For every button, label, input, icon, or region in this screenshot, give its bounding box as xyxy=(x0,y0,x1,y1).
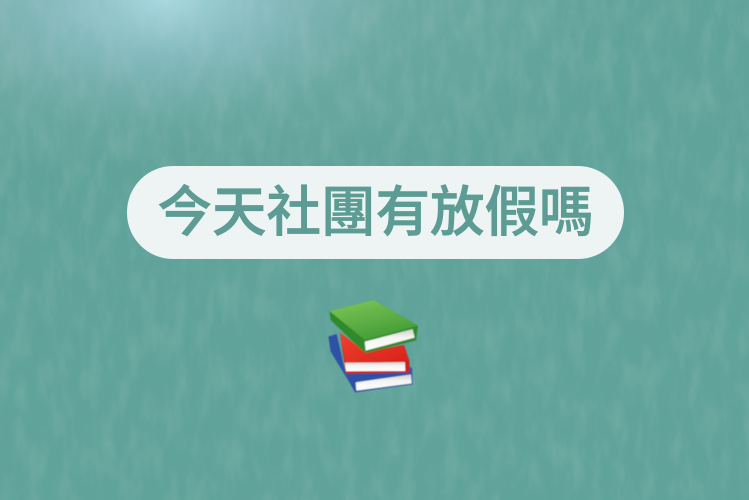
red book xyxy=(340,333,410,374)
icon: stack of books xyxy=(328,300,419,393)
title text: 今天社團有放假嗎 xyxy=(157,182,594,243)
title pill background xyxy=(127,166,624,259)
blue book xyxy=(328,334,413,392)
green book xyxy=(329,300,418,353)
